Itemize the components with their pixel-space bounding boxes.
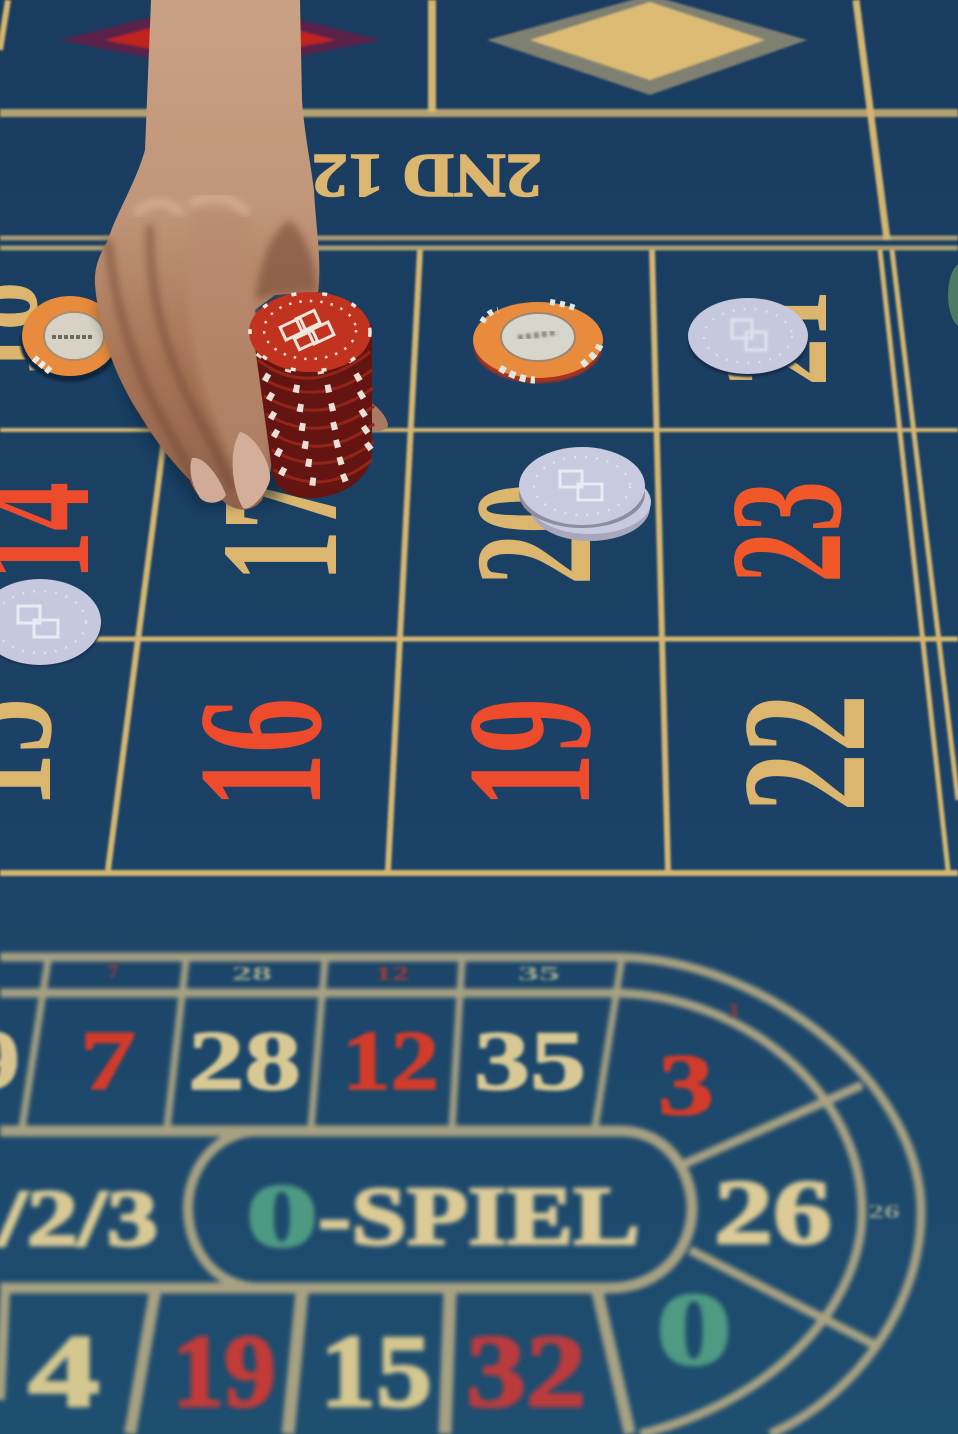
arm and back of hand — [95, 0, 319, 509]
chip knot logo — [280, 310, 334, 350]
chip rim spots — [250, 293, 370, 371]
number 15 lower: 15 — [320, 1314, 432, 1429]
chip knot logo — [18, 606, 58, 637]
green zero: 0 — [246, 1167, 318, 1266]
far right green chip — [948, 263, 958, 327]
tiny 3: 3 — [728, 1000, 738, 1022]
chip edges — [258, 352, 374, 482]
tiny 28: 28 — [232, 963, 272, 985]
number 26: 26 — [714, 1161, 832, 1263]
tiny 7: 7 — [108, 961, 118, 983]
tiny 26: 26 — [868, 1201, 900, 1223]
lavender chip bottom left — [0, 579, 101, 666]
red diamond — [60, 0, 380, 72]
racetrack centre labels — [0, 1161, 832, 1429]
top chip face — [249, 292, 371, 372]
tiny 35: 35 — [518, 963, 560, 985]
index finger tone — [187, 210, 270, 478]
label 0-SPIEL — [246, 1167, 640, 1266]
number 20 gold: 20 — [441, 483, 627, 585]
thumb web shadow — [255, 220, 318, 300]
number 35: 35 — [474, 1014, 586, 1108]
orange chip left — [20, 296, 120, 382]
number 23 red: 23 — [697, 481, 875, 583]
finger shading — [108, 225, 232, 490]
number 19 red: 19 — [430, 698, 628, 808]
number 4: 4 — [28, 1314, 100, 1429]
SPIEL text: -SPIEL — [318, 1170, 640, 1263]
number 19 lower: 19 — [172, 1314, 276, 1429]
hand — [95, 0, 388, 509]
number 16 red: 16 — [161, 698, 359, 808]
fingernails — [190, 458, 226, 503]
number 3: 3 — [658, 1037, 714, 1134]
knuckle highlights — [135, 197, 248, 215]
tiny 12: 12 — [375, 963, 409, 985]
number 21 gold: 21 — [693, 290, 859, 386]
chip knot logo — [560, 471, 602, 500]
racetrack numbers, upper row — [0, 1013, 714, 1134]
table grid lines, upper section — [0, 0, 958, 873]
number 7: 7 — [80, 1014, 136, 1108]
chip knot logo — [732, 320, 766, 350]
stack body — [252, 325, 372, 498]
number 12: 12 — [342, 1014, 439, 1108]
gold diamond — [487, 0, 807, 95]
chip edge spots — [258, 344, 373, 482]
label 1/2/3: /2/3 — [0, 1175, 158, 1263]
red chip stack — [249, 292, 374, 498]
label: 2nd 12: 2ND 12 — [312, 141, 542, 209]
number 22 gold: 22 — [705, 694, 903, 812]
top diamonds — [60, 0, 807, 95]
small finger tip behind stack — [365, 400, 388, 431]
orange chip middle — [473, 302, 603, 383]
number 28: 28 — [188, 1014, 301, 1108]
number 17 gold: 17 — [187, 478, 373, 582]
stacked lavender chips — [519, 447, 651, 541]
green zero lower: 0 — [656, 1272, 732, 1387]
hand shadow — [95, 300, 290, 505]
number 32 lower: 32 — [466, 1314, 586, 1429]
lavender chip right — [688, 298, 808, 377]
racetrack betting layout — [0, 957, 921, 1434]
small tiny numbers — [108, 961, 900, 1223]
